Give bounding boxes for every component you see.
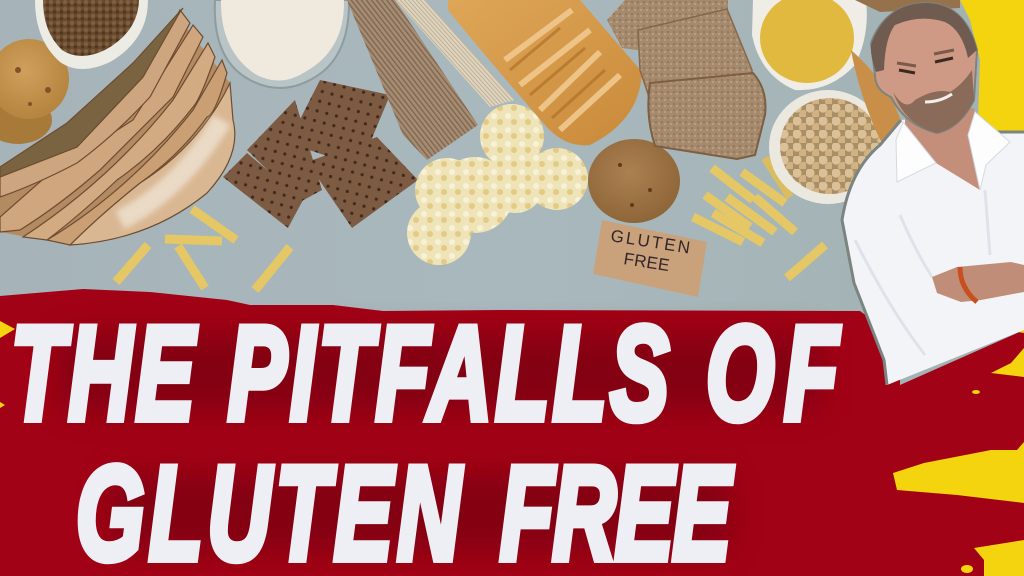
slice 1 crust	[0, 10, 190, 197]
icon: noodle bundles	[347, 0, 515, 160]
title line 1: THE	[11, 299, 197, 447]
sleeve folds	[855, 190, 990, 355]
upper right splash	[991, 348, 1024, 377]
shading behind title	[60, 335, 820, 550]
icon: golden bread loaf	[448, 0, 642, 145]
icon: bowl of buckwheat	[35, 0, 148, 69]
icon: bread crust behind head	[855, 0, 960, 12]
head	[871, 3, 977, 133]
title line 1: OF	[706, 299, 840, 447]
icon: sliced sourdough loaf	[0, 8, 235, 245]
beard	[893, 70, 974, 133]
title line 1: PITFALLS	[228, 299, 669, 447]
middle right splash	[893, 442, 1024, 503]
label: gluten free cardboard sign: FREE	[622, 249, 671, 275]
left edge splash	[0, 321, 15, 338]
icon: bowl of cornmeal	[752, 0, 867, 90]
icon: baguette behind person	[851, 50, 900, 150]
icon: oat cookie	[588, 139, 680, 223]
slice 2	[0, 25, 203, 232]
neck	[905, 108, 980, 190]
icon: glass bowl of rice flour	[215, 0, 349, 88]
slice 3	[23, 43, 215, 240]
smile	[925, 94, 952, 102]
icon: dark crispbread crackers	[223, 80, 418, 228]
icon: penne behind chickpea bowl	[765, 158, 790, 197]
brows	[897, 50, 954, 66]
hair	[871, 3, 977, 72]
slice 1 crumb	[0, 8, 183, 177]
lower right splash	[974, 540, 1024, 576]
icon: bowl of chickpeas	[769, 90, 887, 204]
person	[842, 3, 1024, 385]
loaf underlay	[0, 20, 230, 245]
eyes	[899, 58, 953, 73]
label: gluten free cardboard sign	[593, 220, 707, 297]
shirt cut-out outline	[842, 120, 1024, 385]
icon: rice cakes	[407, 104, 588, 265]
label: gluten free cardboard sign: GLUTEN	[609, 226, 691, 257]
loaf heel	[70, 83, 235, 245]
flour marks on heel	[120, 120, 222, 220]
icon: brown bread slices	[607, 0, 766, 159]
bracelet	[960, 267, 977, 302]
forearm	[932, 262, 1024, 302]
shirt	[842, 112, 1024, 385]
title line 2	[76, 439, 733, 576]
yellow paint splashes	[0, 321, 1024, 576]
left collar	[896, 122, 936, 182]
title	[11, 299, 840, 576]
right collar	[968, 112, 1010, 190]
icon: penne pasta pieces	[116, 168, 825, 290]
yellow top-right backdrop	[960, 0, 1024, 132]
slice 4	[47, 60, 227, 245]
red paint banner	[0, 289, 1024, 576]
icon: cookies left	[0, 39, 69, 144]
title line 1	[11, 299, 840, 447]
